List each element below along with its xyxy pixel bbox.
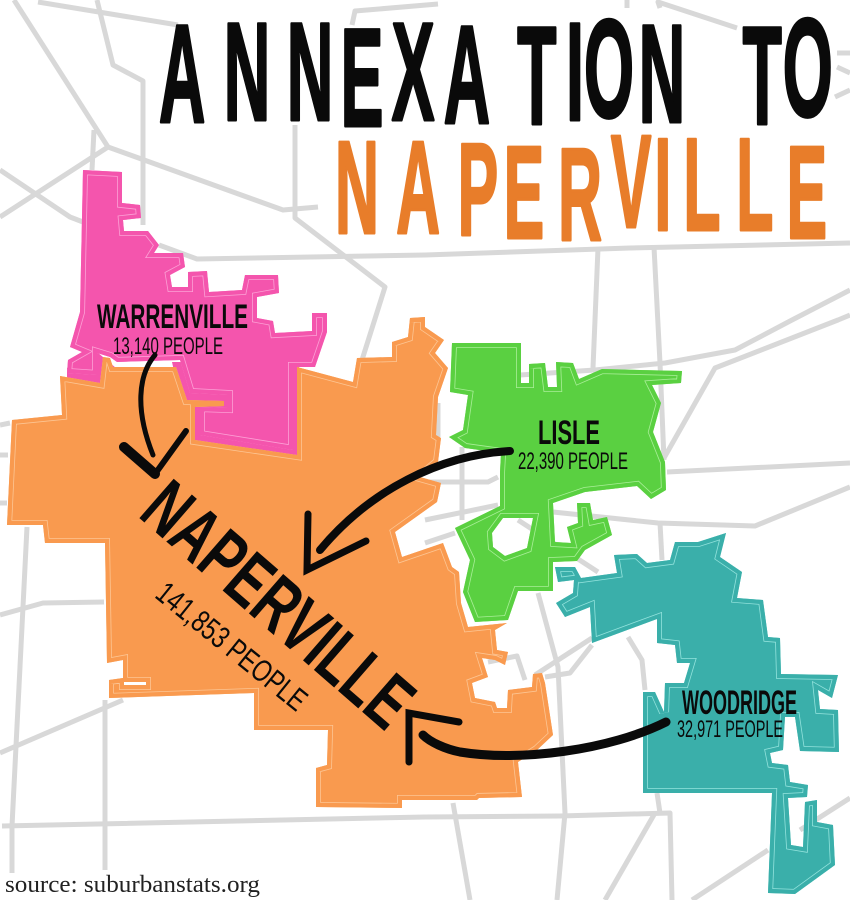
source note: source: suburbanstats.org	[5, 872, 260, 898]
label: Warrenville: 13,140 PEOPLE	[113, 333, 223, 360]
label: Warrenville	[97, 298, 248, 360]
region: Naperville (orange)	[7, 317, 553, 808]
label: Woodridge: 32,971 PEOPLE	[677, 716, 783, 743]
label: Lisle: 22,390 PEOPLE	[518, 448, 628, 475]
arrow: Woodridge to Naperville	[409, 713, 666, 762]
label: Naperville: NAPERVILLE	[126, 465, 430, 745]
title: Naperville: NAPERVILLE	[335, 108, 827, 268]
label: Naperville	[126, 465, 430, 745]
region: Warrenville underlay	[67, 352, 299, 458]
arrow: Lisle to Naperville	[307, 451, 510, 570]
region: Warrenville (pink)	[67, 170, 327, 450]
label: Naperville: 141,853 PEOPLE	[149, 575, 314, 718]
label: Lisle: LISLE	[538, 414, 600, 452]
label: Warrenville: WARRENVILLE	[97, 298, 248, 336]
region: Woodridge (teal)	[555, 533, 839, 894]
label: Woodridge	[677, 684, 797, 743]
arrow: Warrenville to Naperville	[124, 355, 186, 474]
region: Lisle (green)	[449, 343, 682, 622]
label: Lisle	[518, 414, 628, 475]
